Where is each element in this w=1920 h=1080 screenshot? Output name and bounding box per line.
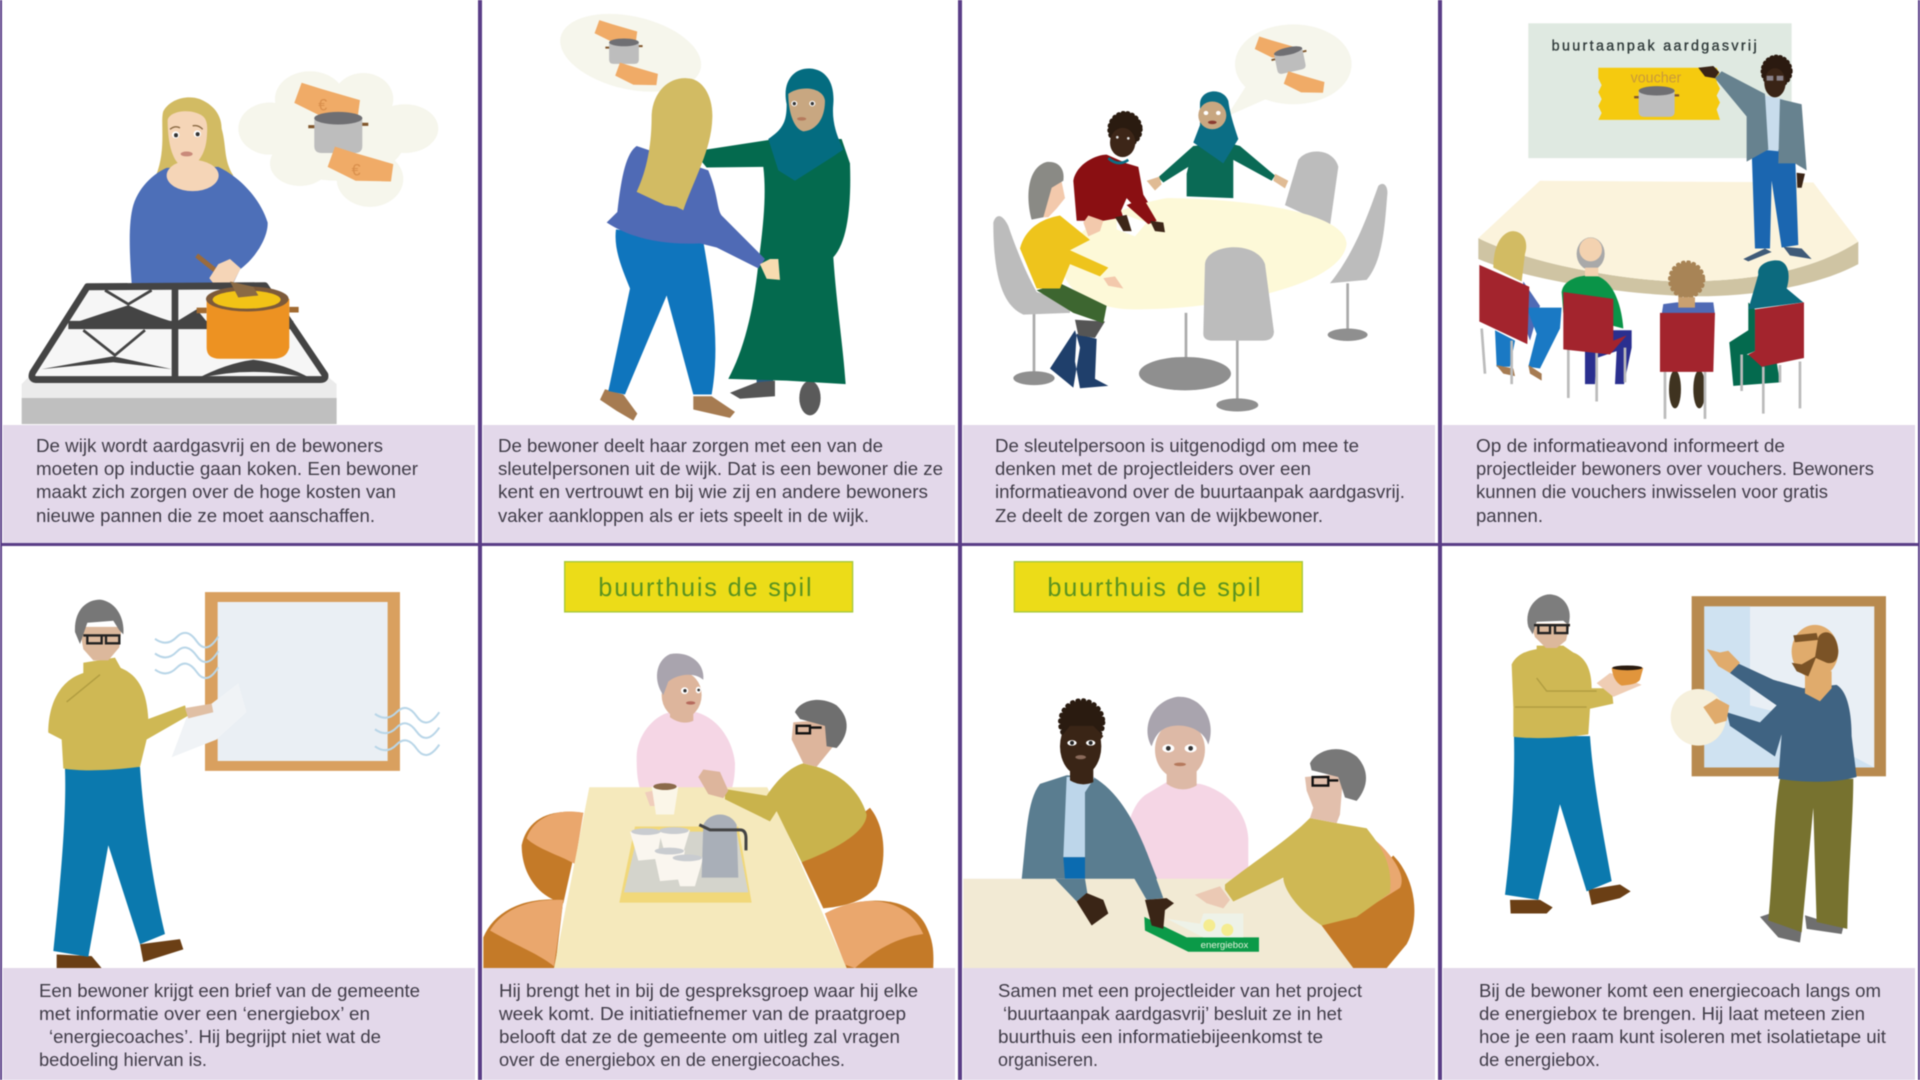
caption text: ‘buurtaanpak aardgasvrij’ besluit ze in het (1003, 1004, 1342, 1024)
table (554, 787, 847, 968)
woman with teal headscarf, standing (1147, 91, 1288, 198)
window (205, 592, 400, 771)
caption text: sleutelpersonen uit de wijk. Dat is een bewoner die ze (498, 459, 943, 479)
projection screen with voucher: voucher (1631, 70, 1682, 87)
caption text: bedoeling hiervan is. (39, 1050, 207, 1070)
caption text (1479, 981, 1886, 1070)
caption text: met informatie over een ‘energiebox’ en (39, 1004, 370, 1024)
sign buurthuis de spil: buurthuis de spil (598, 574, 812, 602)
caption text: maakt zich zorgen over de hoge kosten van (36, 482, 396, 502)
caption text: moeten op inductie gaan koken. Een bewoner (36, 459, 418, 479)
man with dark hair and jacket, body (1022, 701, 1160, 886)
thought cloud with pot and money: € (352, 161, 361, 180)
caption text: week komt. De initiatiefnemer van de praatgroep (498, 1004, 906, 1024)
thought cloud with pot and money (238, 71, 438, 207)
mug held by woman (645, 783, 678, 815)
illustration: three people at table with energiebox (963, 562, 1414, 968)
sign buurthuis de spil (565, 562, 853, 612)
caption text (998, 981, 1362, 1070)
caption background (963, 425, 1435, 543)
caption background (1443, 425, 1915, 543)
sign buurthuis de spil (1014, 562, 1302, 612)
draft waves (155, 633, 439, 755)
caption background (483, 425, 955, 543)
caption text: informatieavond over de buurtaanpak aardgasvrij. (995, 482, 1405, 502)
table (963, 879, 1353, 968)
illustration: conversation at table (483, 562, 933, 968)
caption text (1476, 436, 1874, 526)
panel 6: gespreksgroep in buurthuis (483, 562, 955, 1080)
caption text: Hij brengt het in bij de gespreksgroep waar hij elke (499, 981, 918, 1001)
back chairs (1285, 151, 1387, 341)
man with red sweater (1073, 113, 1158, 223)
tray with mugs and coffee pot (619, 815, 752, 903)
caption text (995, 436, 1405, 526)
illustration: man reading letter near drafty window (48, 592, 439, 968)
caption text: nieuwe pannen die ze moet aanschaffen. (36, 506, 375, 526)
presenter (1698, 57, 1812, 261)
caption text: kent en vertrouwt en bij wie zij en andere bewoners (498, 482, 928, 502)
energiebox with bulbs: energiebox (1201, 940, 1249, 950)
sign buurthuis de spil: buurthuis de spil (1047, 574, 1261, 602)
thought cloud with pot and money: € (318, 96, 327, 115)
window with insulating film (1692, 596, 1886, 776)
caption text: de energiebox te brengen. Hij laat meteen zien (1479, 1004, 1865, 1024)
illustration: two women talking (553, 2, 850, 421)
caption text: De wijk wordt aardgasvrij en de bewoners (36, 436, 383, 456)
caption text: Ze deelt de zorgen van de wijkbewoner. (995, 506, 1323, 526)
man with glasses and pouf (1195, 749, 1414, 968)
energy coach from behind (1703, 625, 1857, 942)
man's arm and dark hands (1055, 845, 1174, 929)
caption text (498, 436, 943, 526)
woman seen from behind in blue (600, 78, 780, 421)
caption text: Op de informatieavond informeert de (1476, 436, 1785, 456)
woman in yellow on chair (993, 162, 1123, 388)
caption text: Samen met een projectleider van het project (998, 981, 1362, 1001)
projection screen with voucher (1528, 23, 1792, 158)
stage (1478, 181, 1858, 296)
illustration: coach insulating a window (1505, 594, 1886, 942)
front chair (1203, 247, 1274, 412)
caption text: kunnen die vouchers inwisselen voor gratis (1476, 482, 1828, 502)
caption background (3, 968, 475, 1080)
illustration: meeting at round table (993, 24, 1387, 412)
caption text: over de energiebox en de energiecoaches. (499, 1050, 845, 1070)
letter (172, 683, 247, 757)
caption background (483, 968, 955, 1080)
caption text: Een bewoner krijgt een brief van de gemeente (39, 981, 420, 1001)
older woman in pink (1120, 697, 1248, 879)
caption text: organiseren. (998, 1050, 1098, 1070)
audience member 3 (1660, 262, 1715, 419)
caption text: projectleider bewoners over vouchers. Bewoners (1476, 459, 1874, 479)
audience member 4 (1729, 260, 1804, 414)
illustration: woman cooking on gas stove (22, 71, 438, 424)
gas stove with grate and counter (22, 285, 337, 424)
caption text: ‘energiecoaches’. Hij begrijpt niet wat de (49, 1027, 381, 1047)
resident with coffee cup (1505, 594, 1643, 913)
caption text: vaker aankloppen als er iets speelt in de wijk. (498, 506, 869, 526)
caption text (39, 981, 420, 1070)
man with glasses reading (48, 600, 213, 968)
woman with blond hair and blue sweater (130, 97, 268, 288)
thought bubble with pot and money (553, 2, 708, 104)
panel 1: bewoner aan het gasfornuis (3, 71, 475, 543)
illustration: presenter and audience (1478, 23, 1858, 419)
panel 7: overleg over informatiebijeenkomst (963, 562, 1435, 1080)
panel 5: brief van de gemeente (3, 592, 475, 1080)
projection screen with voucher: buurtaanpak aardgasvrij (1552, 39, 1757, 55)
round table (1063, 198, 1347, 390)
woman with teal headscarf and green dress (697, 68, 850, 415)
caption text (498, 981, 918, 1070)
caption background (3, 425, 475, 543)
speech bubble with pot and money (1227, 24, 1352, 116)
caption text: buurthuis een informatiebijeenkomst te (998, 1027, 1323, 1047)
orange cooking pot with spatula (197, 282, 299, 359)
caption text: de energiebox. (1479, 1050, 1600, 1070)
caption text (36, 436, 418, 526)
poufs (483, 808, 933, 968)
audience member 1 (1479, 231, 1562, 384)
audience member 2 (1562, 237, 1632, 401)
panel 3: overleg aan ronde tafel (963, 24, 1435, 543)
caption text: De sleutelpersoon is uitgenodigd om mee te (995, 436, 1359, 456)
panel 2: bewoner en sleutelpersoon (483, 2, 955, 543)
older woman in pink (637, 654, 735, 789)
panel 8: energiecoach bij de bewoner (1443, 594, 1915, 1080)
caption background (963, 968, 1435, 1080)
caption text: De bewoner deelt haar zorgen met een van de (498, 436, 883, 456)
roll of insulation tape (1671, 689, 1726, 746)
caption text: hoe je een raam kunt isoleren met isolatietape uit (1479, 1027, 1886, 1047)
caption text: Bij de bewoner komt een energiecoach langs om (1479, 981, 1881, 1001)
caption text: denken met de projectleiders over een (995, 459, 1311, 479)
caption text: pannen. (1476, 506, 1543, 526)
energiebox with bulbs (1144, 913, 1259, 952)
man with glasses (698, 700, 867, 862)
caption text: belooft dat ze de gemeente om uitleg zal vragen (499, 1027, 900, 1047)
caption background (1443, 968, 1915, 1080)
panel 4: informatieavond (1443, 23, 1915, 543)
